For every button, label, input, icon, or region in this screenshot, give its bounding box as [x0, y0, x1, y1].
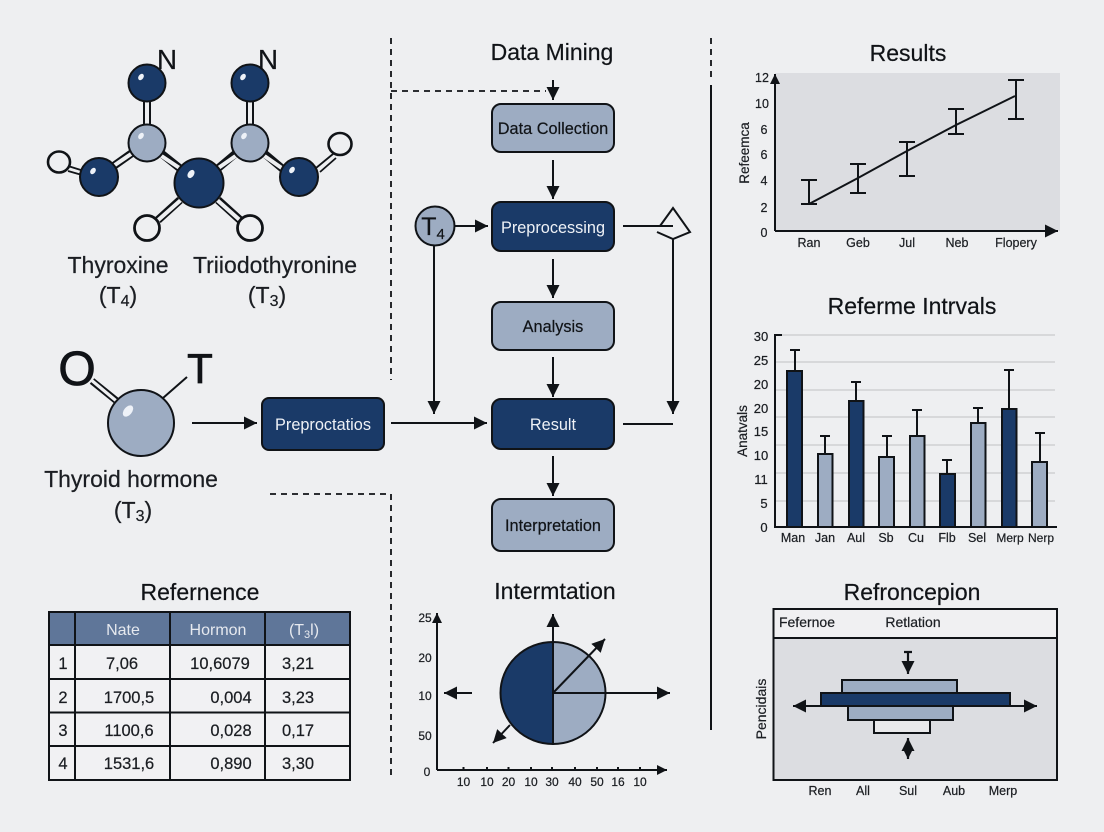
y axis labels: 2	[761, 201, 768, 215]
x axis labels: Sul	[899, 784, 917, 798]
y axis labels: 20	[754, 377, 768, 392]
range line	[793, 705, 1037, 707]
panel: intermtation pie chart	[418, 578, 670, 789]
table text: 2	[58, 689, 68, 707]
y axis labels: 30	[754, 329, 768, 344]
y axis title: Refeemca	[737, 122, 752, 184]
y axis labels: 5	[760, 496, 768, 511]
axis labels: 10	[524, 775, 538, 789]
table text: 10,6079	[190, 655, 250, 673]
table text: Hormon	[190, 622, 246, 639]
table text: 3	[304, 629, 310, 641]
heading: results: Results	[870, 40, 946, 66]
box: analysis	[492, 302, 614, 350]
icon: decision shape	[657, 208, 690, 239]
x axis labels: Aub	[943, 784, 965, 798]
x axis labels: Jul	[899, 236, 915, 250]
arrow: upper marker	[904, 652, 912, 674]
y axis labels: 15	[754, 424, 768, 439]
header labels: Retlation	[885, 614, 941, 630]
panel: thyroid hormone atom	[44, 343, 218, 525]
heading: reference intervals: Referme Intrvals	[828, 293, 996, 319]
axis labels: 10	[480, 775, 494, 789]
x axis labels: All	[856, 784, 870, 798]
table text: 1100,6	[104, 722, 154, 740]
x axis labels: Merp	[989, 784, 1017, 798]
panel: thyroid hormone atom: )	[144, 497, 152, 523]
x axis labels: Flopery	[995, 236, 1038, 250]
arrow: T4 down	[433, 245, 435, 414]
arrow: preprocessing to analysis	[552, 259, 554, 298]
heading: reference table: Refernence	[141, 579, 259, 605]
axis labels: 25	[418, 611, 432, 625]
y axis labels: 10	[755, 97, 769, 111]
axis labels: 0	[424, 765, 431, 779]
arrow: lower marker	[907, 738, 909, 759]
molecule bonds	[68, 98, 336, 222]
T4 node: 4	[436, 226, 445, 243]
arrow: T4 to preprocessing	[455, 225, 488, 227]
table text: 0,028	[210, 722, 252, 740]
box: interpretation: Interpretation	[505, 517, 601, 535]
table text: Nate	[106, 622, 140, 639]
axis labels: 20	[418, 651, 432, 665]
molecule names: (T	[99, 282, 121, 308]
table text	[58, 622, 319, 773]
table text: 0,17	[282, 722, 314, 740]
y axis title: Anatvals	[735, 405, 750, 457]
header labels: Fefernoe	[779, 614, 835, 630]
y axis labels: 11	[754, 472, 768, 487]
molecule names: )	[278, 282, 286, 308]
section dividers	[270, 38, 711, 780]
x axis labels: Aul	[847, 531, 865, 545]
table grid	[49, 612, 350, 780]
x axis labels	[781, 531, 1054, 545]
x axis labels: Jan	[815, 531, 835, 545]
table text: 1700,5	[104, 689, 154, 707]
x axis labels: Sb	[878, 531, 894, 545]
range bars	[821, 680, 1010, 733]
panel: reference table	[49, 579, 350, 780]
line: preprocessing to decision	[623, 225, 673, 227]
table text: 3	[58, 722, 68, 740]
arrow: result to interpretation	[552, 456, 554, 496]
x axis labels: Sel	[968, 531, 986, 545]
header labels	[779, 614, 941, 630]
pie arrows	[444, 614, 670, 743]
arrow: decision down	[672, 239, 674, 414]
x axis labels	[798, 236, 1038, 250]
molecule names: 3	[270, 293, 279, 310]
box: data collection: Data Collection	[498, 120, 608, 138]
bars	[787, 371, 1047, 527]
line: result to right	[623, 423, 673, 425]
arrow: analysis to result	[552, 357, 554, 397]
panel: results line chart	[737, 40, 1060, 250]
table text: 0,890	[210, 755, 252, 773]
axis labels: 50	[418, 729, 432, 743]
y axis labels	[754, 329, 768, 535]
table text: (T	[289, 622, 304, 639]
y axis labels: 10	[754, 448, 768, 463]
axis labels: 10	[418, 689, 432, 703]
molecule names: Thyroxine	[68, 252, 168, 278]
y axis labels	[755, 71, 769, 240]
table text: l)	[310, 622, 319, 639]
table text: 1531,6	[104, 755, 154, 773]
molecule names	[68, 252, 357, 310]
panel: thyroid hormone atom: 3	[136, 508, 145, 525]
table text: 7,06	[106, 655, 138, 673]
y axis labels: 25	[754, 353, 768, 368]
box: preproctatios	[262, 398, 384, 450]
axis labels: 10	[457, 775, 470, 789]
heading: refroncepion: Refroncepion	[844, 579, 980, 605]
arrow: into data collection	[552, 80, 554, 100]
y axis labels: 0	[760, 520, 768, 535]
table text: 3,23	[282, 689, 314, 707]
x axis labels: Ran	[798, 236, 821, 250]
y axis labels: 4	[761, 174, 768, 188]
molecule names: )	[129, 282, 137, 308]
chart axes	[437, 613, 667, 771]
x axis labels: Merp	[996, 531, 1024, 545]
molecule names: 4	[121, 293, 130, 310]
axis labels: 40	[568, 775, 582, 789]
arrow: preproctatios to result	[391, 422, 487, 424]
x axis labels: Nerp	[1028, 531, 1054, 545]
box: result: Result	[530, 416, 577, 434]
panel: thyroxine and triiodothyronine molecule	[48, 44, 357, 310]
x axis labels	[809, 784, 1017, 798]
atom labels	[157, 44, 278, 75]
y axis labels: 12	[755, 71, 769, 85]
table text: 0,004	[210, 689, 252, 707]
T4 node: T	[421, 213, 436, 241]
table text: 3,21	[282, 655, 314, 673]
heading: data mining: Data Mining	[491, 39, 613, 65]
axis labels: 20	[502, 775, 515, 789]
flowchart	[416, 80, 690, 551]
T4 node	[416, 206, 454, 246]
axes	[775, 335, 1057, 527]
table text: 3,30	[282, 755, 314, 773]
box: preprocessing	[492, 202, 614, 251]
x axis labels: Geb	[846, 236, 870, 250]
box: preproctatios: Preproctatios	[275, 416, 371, 434]
box: data collection	[492, 104, 614, 152]
panel: thyroid hormone atom: O	[58, 343, 96, 396]
table text: 1	[58, 655, 68, 673]
atom labels: N	[157, 44, 177, 75]
panel: thyroid hormone atom: (T	[114, 497, 136, 523]
axis labels: 50	[590, 775, 604, 789]
panel: refroncepion range chart	[753, 579, 1057, 798]
arrow: collection to preprocessing	[552, 160, 554, 199]
panel: thyroid hormone atom: Thyroid hormone	[44, 466, 218, 492]
box: result	[492, 399, 614, 449]
y axis labels: 20	[754, 401, 768, 416]
molecule names: (T	[248, 282, 270, 308]
y axis title: Pencidais	[753, 679, 769, 739]
pie	[501, 642, 606, 744]
axis labels: 16	[611, 775, 625, 789]
atom labels: N	[258, 44, 278, 75]
heading: intermtation: Intermtation	[494, 578, 616, 604]
atoms	[48, 64, 352, 240]
axis labels: 10	[633, 775, 647, 789]
x axis labels: Neb	[946, 236, 969, 250]
molecule names: Triiodothyronine	[193, 252, 357, 278]
y axis labels: 6	[761, 123, 768, 137]
x axis labels: Ren	[809, 784, 832, 798]
y axis labels: 6	[761, 148, 768, 162]
box: preprocessing: Preprocessing	[501, 219, 605, 237]
error bars	[790, 350, 1045, 474]
table text: 4	[58, 755, 68, 773]
panel: thyroid hormone atom: T	[187, 345, 213, 392]
axis labels	[418, 611, 647, 789]
y axis labels: 0	[761, 226, 768, 240]
gridlines	[775, 335, 1055, 501]
box: analysis: Analysis	[523, 318, 583, 336]
x axis labels: Flb	[938, 531, 956, 545]
trend line	[809, 96, 1015, 204]
axis labels: 30	[545, 775, 559, 789]
plot area	[775, 73, 1060, 231]
panel: reference intervals bar chart	[735, 293, 1057, 545]
chart frame	[774, 609, 1057, 780]
arrow: hormone to preprocessing	[192, 422, 257, 424]
x axis labels: Cu	[908, 531, 924, 545]
x axis labels: Man	[781, 531, 805, 545]
box: interpretation	[492, 499, 614, 551]
error bars	[801, 80, 1024, 204]
axes	[775, 74, 1058, 231]
